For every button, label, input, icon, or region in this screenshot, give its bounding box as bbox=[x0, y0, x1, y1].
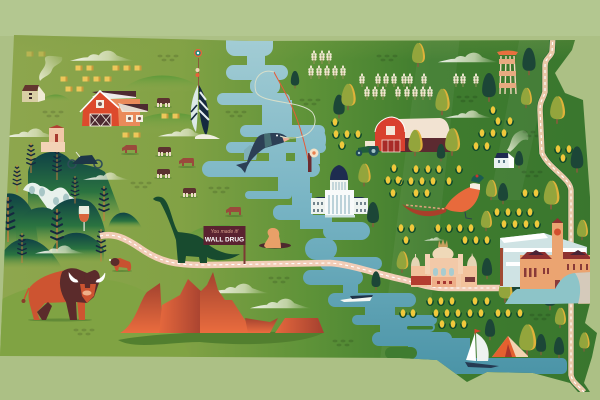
prairie dog bbox=[259, 228, 291, 248]
feather ornament bbox=[191, 49, 220, 139]
white farmhouse with smoke bbox=[494, 130, 528, 168]
red ranch barn bbox=[80, 91, 148, 126]
pale hills in the west bbox=[45, 76, 230, 237]
fish leaping bbox=[236, 133, 290, 173]
sailboat bbox=[465, 329, 499, 368]
wheat field bbox=[308, 50, 479, 100]
Wall Drug sign bbox=[204, 226, 246, 264]
motorcycle bbox=[68, 152, 102, 168]
red dairy barn bbox=[375, 117, 450, 152]
corn field bbox=[331, 106, 573, 329]
clock tower station bbox=[520, 218, 592, 290]
Wall Drug sign: You made it! bbox=[211, 229, 239, 235]
red rock badlands bbox=[118, 272, 324, 345]
trees bbox=[291, 43, 590, 358]
wine glass bbox=[79, 206, 89, 231]
pheasant bbox=[402, 174, 484, 219]
cattle bbox=[121, 98, 243, 217]
state capitol bbox=[310, 165, 368, 218]
waterfall bbox=[505, 272, 593, 304]
pine trees bbox=[2, 143, 109, 263]
clouds bbox=[4, 51, 499, 308]
small bison calf bbox=[109, 258, 132, 272]
road north-south bbox=[540, 36, 584, 392]
tent bbox=[492, 336, 528, 357]
bottom-left hill bbox=[0, 289, 88, 356]
Wall Drug sign: WALL DRUG bbox=[205, 236, 244, 244]
tractor bbox=[356, 141, 380, 156]
farmhouse with smoke bbox=[22, 56, 62, 102]
hay bales bbox=[26, 52, 180, 138]
road east-west bbox=[100, 235, 505, 288]
glass office building bbox=[500, 233, 587, 287]
dinosaur bbox=[153, 197, 240, 263]
Corn Palace bbox=[411, 239, 477, 287]
Black Hills mounds bbox=[0, 152, 142, 268]
old tower on hill bbox=[41, 125, 65, 152]
river bbox=[202, 30, 567, 374]
motor boat bbox=[340, 295, 373, 302]
bison bbox=[22, 268, 105, 322]
fishing rod and line bbox=[255, 71, 318, 172]
Mount Rushmore bbox=[23, 182, 74, 210]
river green inlet islands bbox=[385, 326, 433, 359]
lookout tower bbox=[497, 50, 518, 94]
grass tufts bbox=[42, 55, 550, 346]
